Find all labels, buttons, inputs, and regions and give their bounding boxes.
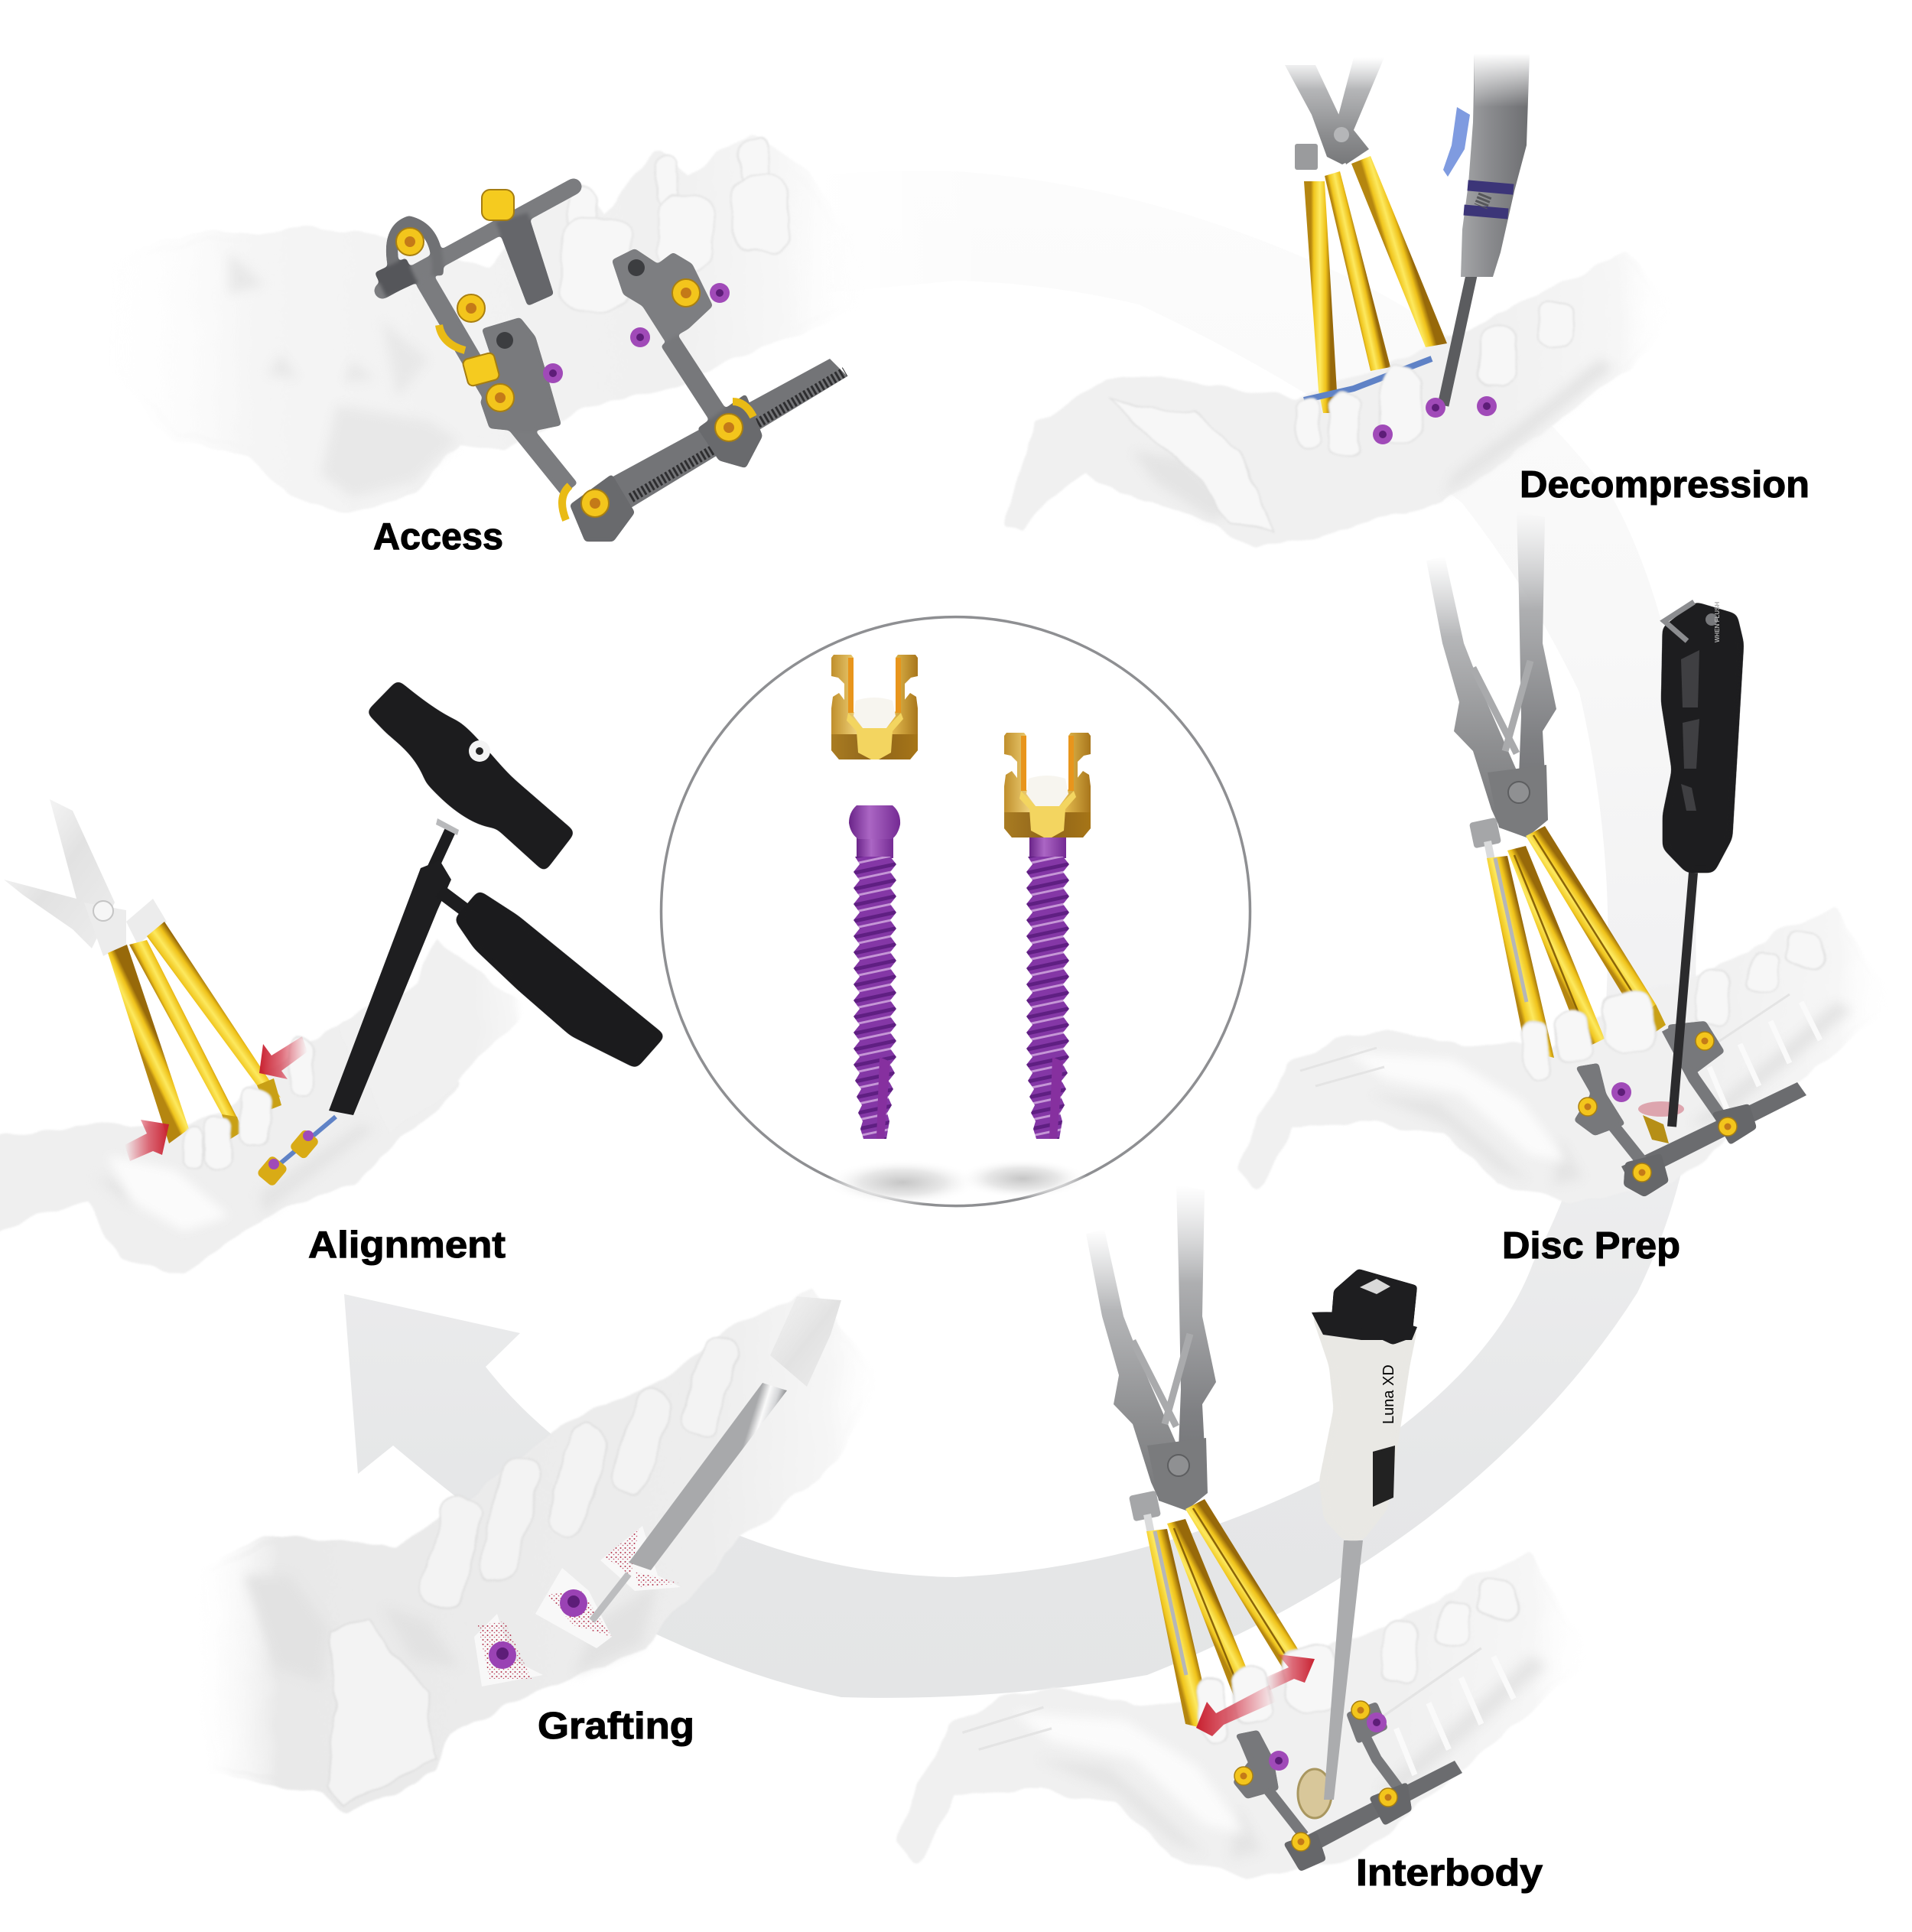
sensor caps bbox=[496, 259, 645, 349]
label: Access: Access bbox=[373, 516, 503, 558]
purple screws bbox=[543, 283, 730, 383]
bone shading: grafting bbox=[245, 1335, 740, 1805]
label: Disc Prep: Disc Prep bbox=[1502, 1225, 1680, 1267]
panel: disc prep step bbox=[1244, 512, 1890, 1199]
label: Decompression: Decompression bbox=[1520, 464, 1810, 506]
drill instrument bbox=[1443, 54, 1530, 405]
panel: alignment step bbox=[0, 680, 665, 1268]
driver handle: WHEN FLUSH bbox=[1714, 601, 1721, 642]
bone shading: alignment bbox=[96, 1124, 375, 1231]
bone shading: decompression bbox=[1132, 359, 1614, 519]
spine bone: interbody bbox=[902, 1557, 1588, 1875]
spinous lobes: disc prep bbox=[1520, 932, 1823, 1080]
left tulip head bbox=[831, 655, 918, 759]
panel: decompression step bbox=[1008, 54, 1670, 545]
inserter instrument: Luna XD bbox=[1380, 1364, 1397, 1424]
center circle: screw implants bbox=[661, 617, 1250, 1206]
right tulip head bbox=[1004, 733, 1091, 838]
spine bone: decompression bbox=[1008, 254, 1670, 545]
graft patches bbox=[474, 1526, 681, 1686]
left screw bbox=[849, 805, 900, 1139]
spine bone: disc prep bbox=[1244, 912, 1890, 1199]
inserter instrument bbox=[1312, 1269, 1417, 1800]
panel: grafting step bbox=[202, 1293, 875, 1808]
gold lock caps bbox=[462, 190, 514, 387]
label: Grafting: Grafting bbox=[538, 1706, 694, 1747]
label: Alignment: Alignment bbox=[308, 1225, 506, 1266]
frame: interbody bbox=[1233, 1701, 1462, 1872]
label: Interbody: Interbody bbox=[1356, 1852, 1543, 1894]
graft instrument bbox=[592, 1296, 841, 1621]
red arrows: alignment bbox=[125, 1036, 307, 1161]
pliers: decompression bbox=[1285, 57, 1384, 170]
retractor tubes: interbody bbox=[1086, 1185, 1325, 1731]
bone shading: access bbox=[229, 137, 790, 497]
t-handle instrument bbox=[329, 680, 665, 1115]
red arrows: interbody bbox=[1196, 1654, 1315, 1736]
spine bone: alignment bbox=[0, 1010, 457, 1268]
spine bone: access bbox=[115, 137, 864, 507]
right screw bbox=[1026, 838, 1069, 1139]
purple screws bbox=[489, 1589, 587, 1669]
spinous lobes: alignment bbox=[182, 1040, 314, 1169]
metal frame bbox=[375, 187, 763, 542]
rack bar bbox=[600, 359, 847, 512]
panel: access step bbox=[115, 137, 864, 542]
spinous lobes: interbody bbox=[1195, 1579, 1517, 1743]
spine bone: grafting bbox=[202, 1293, 875, 1808]
gold hooks bbox=[439, 325, 753, 520]
circle outline bbox=[661, 617, 1250, 1206]
floor shadows bbox=[826, 1159, 1088, 1205]
gold tubes: decompression bbox=[1304, 156, 1447, 413]
panel: interbody step bbox=[902, 1185, 1588, 1875]
purple screws bbox=[1373, 396, 1497, 444]
retractor frame: access bbox=[375, 187, 847, 542]
driver handle bbox=[1661, 601, 1744, 1127]
pliers: alignment bbox=[4, 799, 167, 956]
gold tubes: alignment bbox=[108, 922, 281, 1143]
spinous lobes: decompression bbox=[1109, 302, 1574, 532]
retractor tubes: disc prep bbox=[1426, 512, 1666, 1058]
gold fasteners bbox=[396, 228, 743, 517]
faded spine end bbox=[337, 940, 527, 1132]
frame: disc prep bbox=[1574, 1021, 1806, 1197]
background circular arrow bbox=[344, 153, 1696, 1698]
blue rod bbox=[1304, 359, 1432, 400]
rod and tulips bbox=[256, 1117, 336, 1187]
